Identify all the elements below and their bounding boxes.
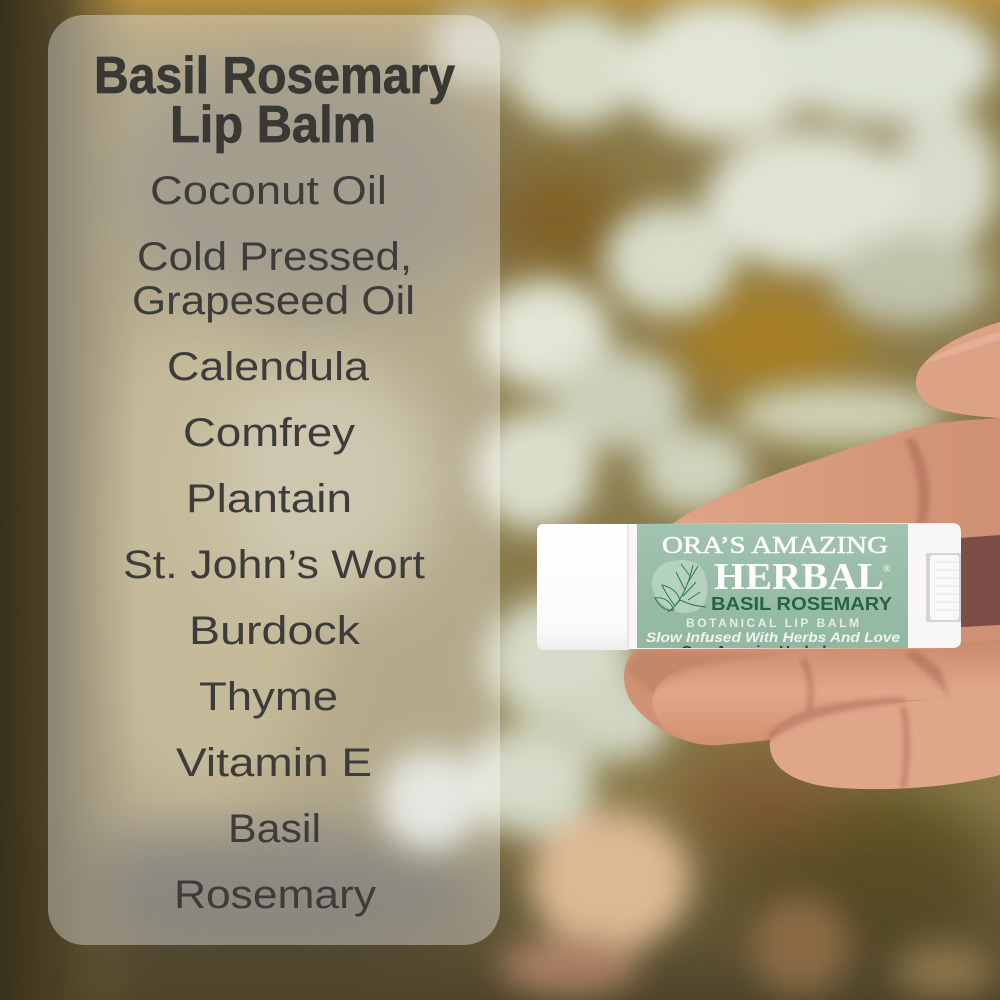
- brand text: ORA’S AMAZING: [662, 533, 888, 559]
- lip balm tube: [537, 523, 961, 658]
- ingredient list: Thyme: [199, 675, 338, 719]
- ingredient list: Cold Pressed,: [137, 235, 412, 279]
- ingredient list: St. John’s Wort: [123, 543, 425, 587]
- fingernail: [925, 332, 1000, 362]
- ingredient list: Plantain: [186, 477, 352, 521]
- hand holding the tube: [624, 322, 1000, 789]
- ingredient list: Basil: [228, 807, 321, 851]
- ingredient list: Rosemary: [174, 873, 376, 917]
- product name: BASIL ROSEMARY: [711, 594, 892, 614]
- ingredient list: Comfrey: [183, 411, 355, 455]
- ingredient list: Grapeseed Oil: [132, 279, 415, 323]
- heading: Basil Rosemary: [94, 47, 455, 105]
- ingredient list: [123, 169, 425, 917]
- ingredient list: Burdock: [189, 609, 361, 653]
- ingredient list: Coconut Oil: [150, 169, 387, 213]
- heading: Lip Balm: [170, 96, 376, 154]
- heading: [94, 47, 455, 154]
- bottom finger: [770, 695, 1000, 789]
- panel: ingredients: [48, 15, 500, 945]
- tube edge line: [627, 524, 629, 650]
- lower palm finger: [624, 625, 1000, 745]
- ingredient list: Vitamin E: [176, 741, 372, 785]
- dark area behind fingers: [800, 530, 1000, 700]
- label: ®: [883, 564, 891, 575]
- label: [637, 524, 908, 658]
- website: OrasAmazingHerbal.com: [681, 643, 862, 658]
- icon: herb sprig: [652, 560, 708, 613]
- tube body: [628, 523, 961, 649]
- ingredient list: Calendula: [167, 345, 370, 389]
- tube cap: [537, 524, 628, 650]
- middle finger tip: [653, 640, 1000, 744]
- label: HERBAL: [714, 556, 884, 598]
- twist notch and wheel: [926, 553, 961, 622]
- tagline: Slow Infused With Herbs And Love: [646, 630, 901, 645]
- descriptor: BOTANICAL LIP BALM: [686, 616, 859, 630]
- index finger: [672, 418, 1000, 538]
- thumb: [916, 322, 1000, 418]
- crease shading: [625, 437, 950, 788]
